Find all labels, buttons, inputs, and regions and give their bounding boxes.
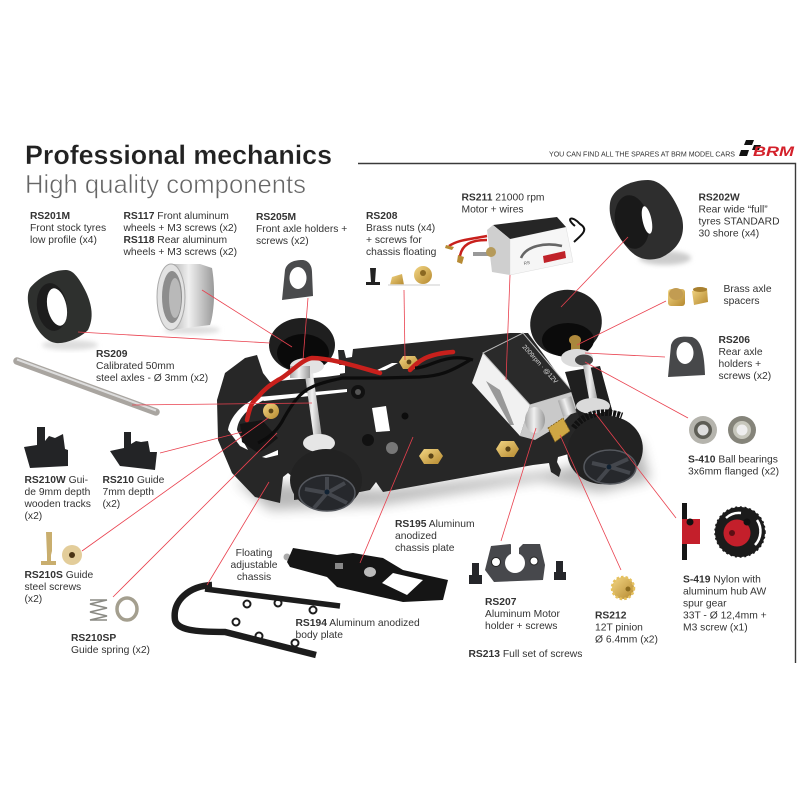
label: RS210: 7mm depth [102, 487, 154, 498]
part: RS210SP spring [90, 598, 137, 620]
label: RS117 RS118: wheels + M3 screws (x2) [122, 247, 237, 258]
part: RS195 chassis plate [284, 548, 448, 602]
frame line [358, 164, 796, 663]
label: RS210SP: RS210SP [71, 633, 116, 644]
assembled chassis [217, 282, 649, 511]
label: RS195: RS195 [395, 519, 427, 530]
label: RS213: Full set of screws [500, 649, 582, 660]
part: brass spacers [668, 287, 708, 306]
motor wires [449, 236, 487, 256]
label: RS210W: Gui- [66, 475, 88, 486]
label: RS206: screws (x2) [718, 371, 771, 382]
label: RS210S: Guide [63, 570, 93, 581]
label: S-410: Ball bearings [715, 454, 778, 466]
label: RS206: RS206 [718, 335, 750, 346]
chassis cutouts [228, 363, 398, 458]
part: RS202W tyre [610, 180, 691, 265]
front axle [290, 358, 335, 452]
part: RS208 screws and nuts [366, 266, 440, 285]
BRM logo: BRM [753, 143, 794, 159]
leader: floating chassis [207, 482, 269, 585]
label: S-419: aluminum hub AW [683, 586, 766, 598]
chassis plate [217, 333, 612, 503]
label: floating chassis: adjustable [231, 560, 278, 571]
label: RS206: Rear axle [718, 347, 763, 358]
label: RS208: Brass nuts (x4) [366, 223, 435, 234]
subtitle: High quality components [25, 169, 306, 199]
red wire [247, 352, 453, 420]
label: S-410: 3x6mm flanged (x2) [688, 466, 779, 478]
part: RS212 pinion [612, 577, 634, 599]
chassis holes [351, 385, 408, 454]
label: brass spacers: spacers [724, 296, 760, 307]
leader: RS195 [360, 437, 413, 563]
label: RS194: body plate [296, 630, 343, 641]
label: RS206: holders + [718, 359, 761, 370]
part: RS210W guide [24, 427, 68, 468]
label: RS208: chassis floating [366, 247, 437, 258]
label: RS211: RS211 [462, 192, 493, 204]
leader: RS201M [78, 332, 270, 343]
label: RS207: Aluminum Motor [485, 609, 561, 620]
rear bottom wheel [561, 409, 649, 491]
label: RS210W: (x2) [24, 511, 42, 522]
leader: RS205M [303, 298, 308, 360]
part: RS205M holder [282, 260, 313, 300]
label: RS213: RS213 [468, 649, 500, 660]
car shadow [235, 440, 650, 510]
label: RS210S: RS210S [24, 570, 63, 581]
label: RS202W: 30 shore (x4) [698, 228, 759, 240]
part: RS201M tyre [28, 270, 98, 350]
label: floating chassis: chassis [237, 572, 271, 583]
rear top tyre [523, 282, 609, 364]
spares note: YOU CAN FIND ALL THE SPARES AT BRM MODEL CARS [549, 152, 735, 158]
leader: RS117 [202, 290, 292, 347]
part: RS211 motor: RS [523, 260, 530, 266]
label: RS207: holder + screws [485, 621, 557, 632]
leader: S-410 [585, 362, 688, 418]
leader: RS208 [404, 290, 405, 360]
part: RS211 motor [445, 217, 584, 275]
label: RS212: 12T pinion [595, 622, 643, 634]
label: RS210W: RS210W [24, 475, 66, 486]
leader: spacers [577, 301, 666, 345]
label: RS201M: low profile (x4) [30, 235, 97, 246]
label: RS210W: de 9mm depth [24, 487, 91, 498]
label: RS210W: wooden tracks [24, 499, 91, 510]
label: S-419: S-419 [683, 574, 711, 586]
label: RS212: Ø 6.4mm (x2) [595, 634, 658, 646]
label: RS194: RS194 [296, 618, 327, 629]
BRM logo [739, 140, 794, 159]
label: S-419: Nylon with [710, 574, 761, 586]
part: RS210S screws [41, 532, 82, 565]
black wire [258, 358, 473, 443]
label: RS202W: tyres STANDARD [698, 216, 780, 228]
part: RS206 holder [668, 337, 705, 377]
label: RS117 RS118: Rear aluminum [154, 235, 227, 246]
label: RS205M: screws (x2) [256, 236, 309, 247]
front bottom wheel [290, 449, 362, 511]
front top tyre [269, 318, 335, 372]
label: RS117 RS118: RS118 [124, 235, 155, 246]
rear axle part [565, 366, 612, 420]
leader: RS210 [160, 432, 242, 453]
label: RS205M: RS205M [256, 212, 296, 223]
label: RS201M: RS201M [30, 211, 70, 222]
label: RS205M: Front axle holders + [256, 224, 347, 235]
label: RS210S: steel screws [24, 582, 81, 593]
label: RS209: Calibrated 50mm [96, 361, 174, 372]
leader: RS202W [561, 237, 628, 307]
part: RS207 motor holder [469, 544, 566, 584]
label: RS195: anodized [395, 531, 437, 542]
label: RS117 RS118: RS117 [124, 211, 155, 222]
title: Professional mechanics [25, 140, 332, 170]
label: RS210S: (x2) [24, 594, 42, 605]
label: S-419: spur gear [683, 598, 727, 610]
label: RS195: chassis plate [395, 543, 455, 554]
leader: S-419 [595, 413, 676, 518]
leader lines [78, 237, 688, 597]
part: RS210 guide [110, 432, 157, 470]
on-board motor: 2009rpm · @12V [521, 344, 559, 386]
guide assembly [240, 420, 278, 453]
label: S-419: M3 screw (x1) [683, 622, 748, 634]
part: S-410 bearings [689, 416, 756, 444]
label: RS211: 21000 rpm [492, 192, 545, 204]
label: RS201M: Front stock tyres [30, 223, 106, 234]
leader: RS209 [132, 403, 312, 405]
part: RS209 axle [17, 360, 156, 412]
leader: RS210SP [113, 433, 277, 597]
part: RS194 body plate [175, 585, 340, 655]
leader: RS206 [585, 353, 665, 357]
leader: RS210S [82, 418, 268, 551]
label: RS210SP: Guide spring (x2) [71, 645, 150, 656]
label: RS209: RS209 [96, 349, 128, 360]
label: RS202W: Rear wide “full” [698, 204, 768, 216]
label: RS194: Aluminum anodized [327, 618, 420, 629]
label: RS195: Aluminum [426, 519, 475, 530]
label: floating chassis: Floating [236, 548, 273, 559]
pinion on motor [548, 418, 570, 442]
label: RS211: Motor + wires [462, 204, 524, 216]
label: S-419: 33T - Ø 12,4mm + [683, 610, 767, 622]
label: RS208: RS208 [366, 211, 398, 222]
brass nuts [263, 356, 519, 464]
part: S-419 spur gear [682, 503, 765, 560]
label: RS117 RS118: Front aluminum [154, 211, 229, 222]
rear bearings [561, 335, 610, 414]
on-board motor [472, 333, 580, 440]
label: brass spacers: Brass axle [724, 284, 772, 295]
label: RS208: + screws for [366, 235, 422, 246]
label: RS202W: RS202W [698, 192, 740, 204]
label: RS117 RS118: wheels + M3 screws (x2) [122, 223, 237, 234]
leader: RS207 [501, 428, 536, 541]
label: RS212: RS212 [595, 610, 627, 622]
label: RS209: steel axles - Ø 3mm (x2) [96, 373, 208, 384]
label: RS210: (x2) [102, 499, 120, 510]
label: RS210: Guide [134, 475, 165, 486]
label: RS207: RS207 [485, 597, 517, 608]
leader: RS211 [506, 275, 510, 380]
label: S-410: S-410 [688, 454, 716, 466]
leader: RS212 [560, 435, 621, 570]
label: RS210: RS210 [102, 475, 134, 486]
part: RS117 wheel [157, 264, 220, 334]
